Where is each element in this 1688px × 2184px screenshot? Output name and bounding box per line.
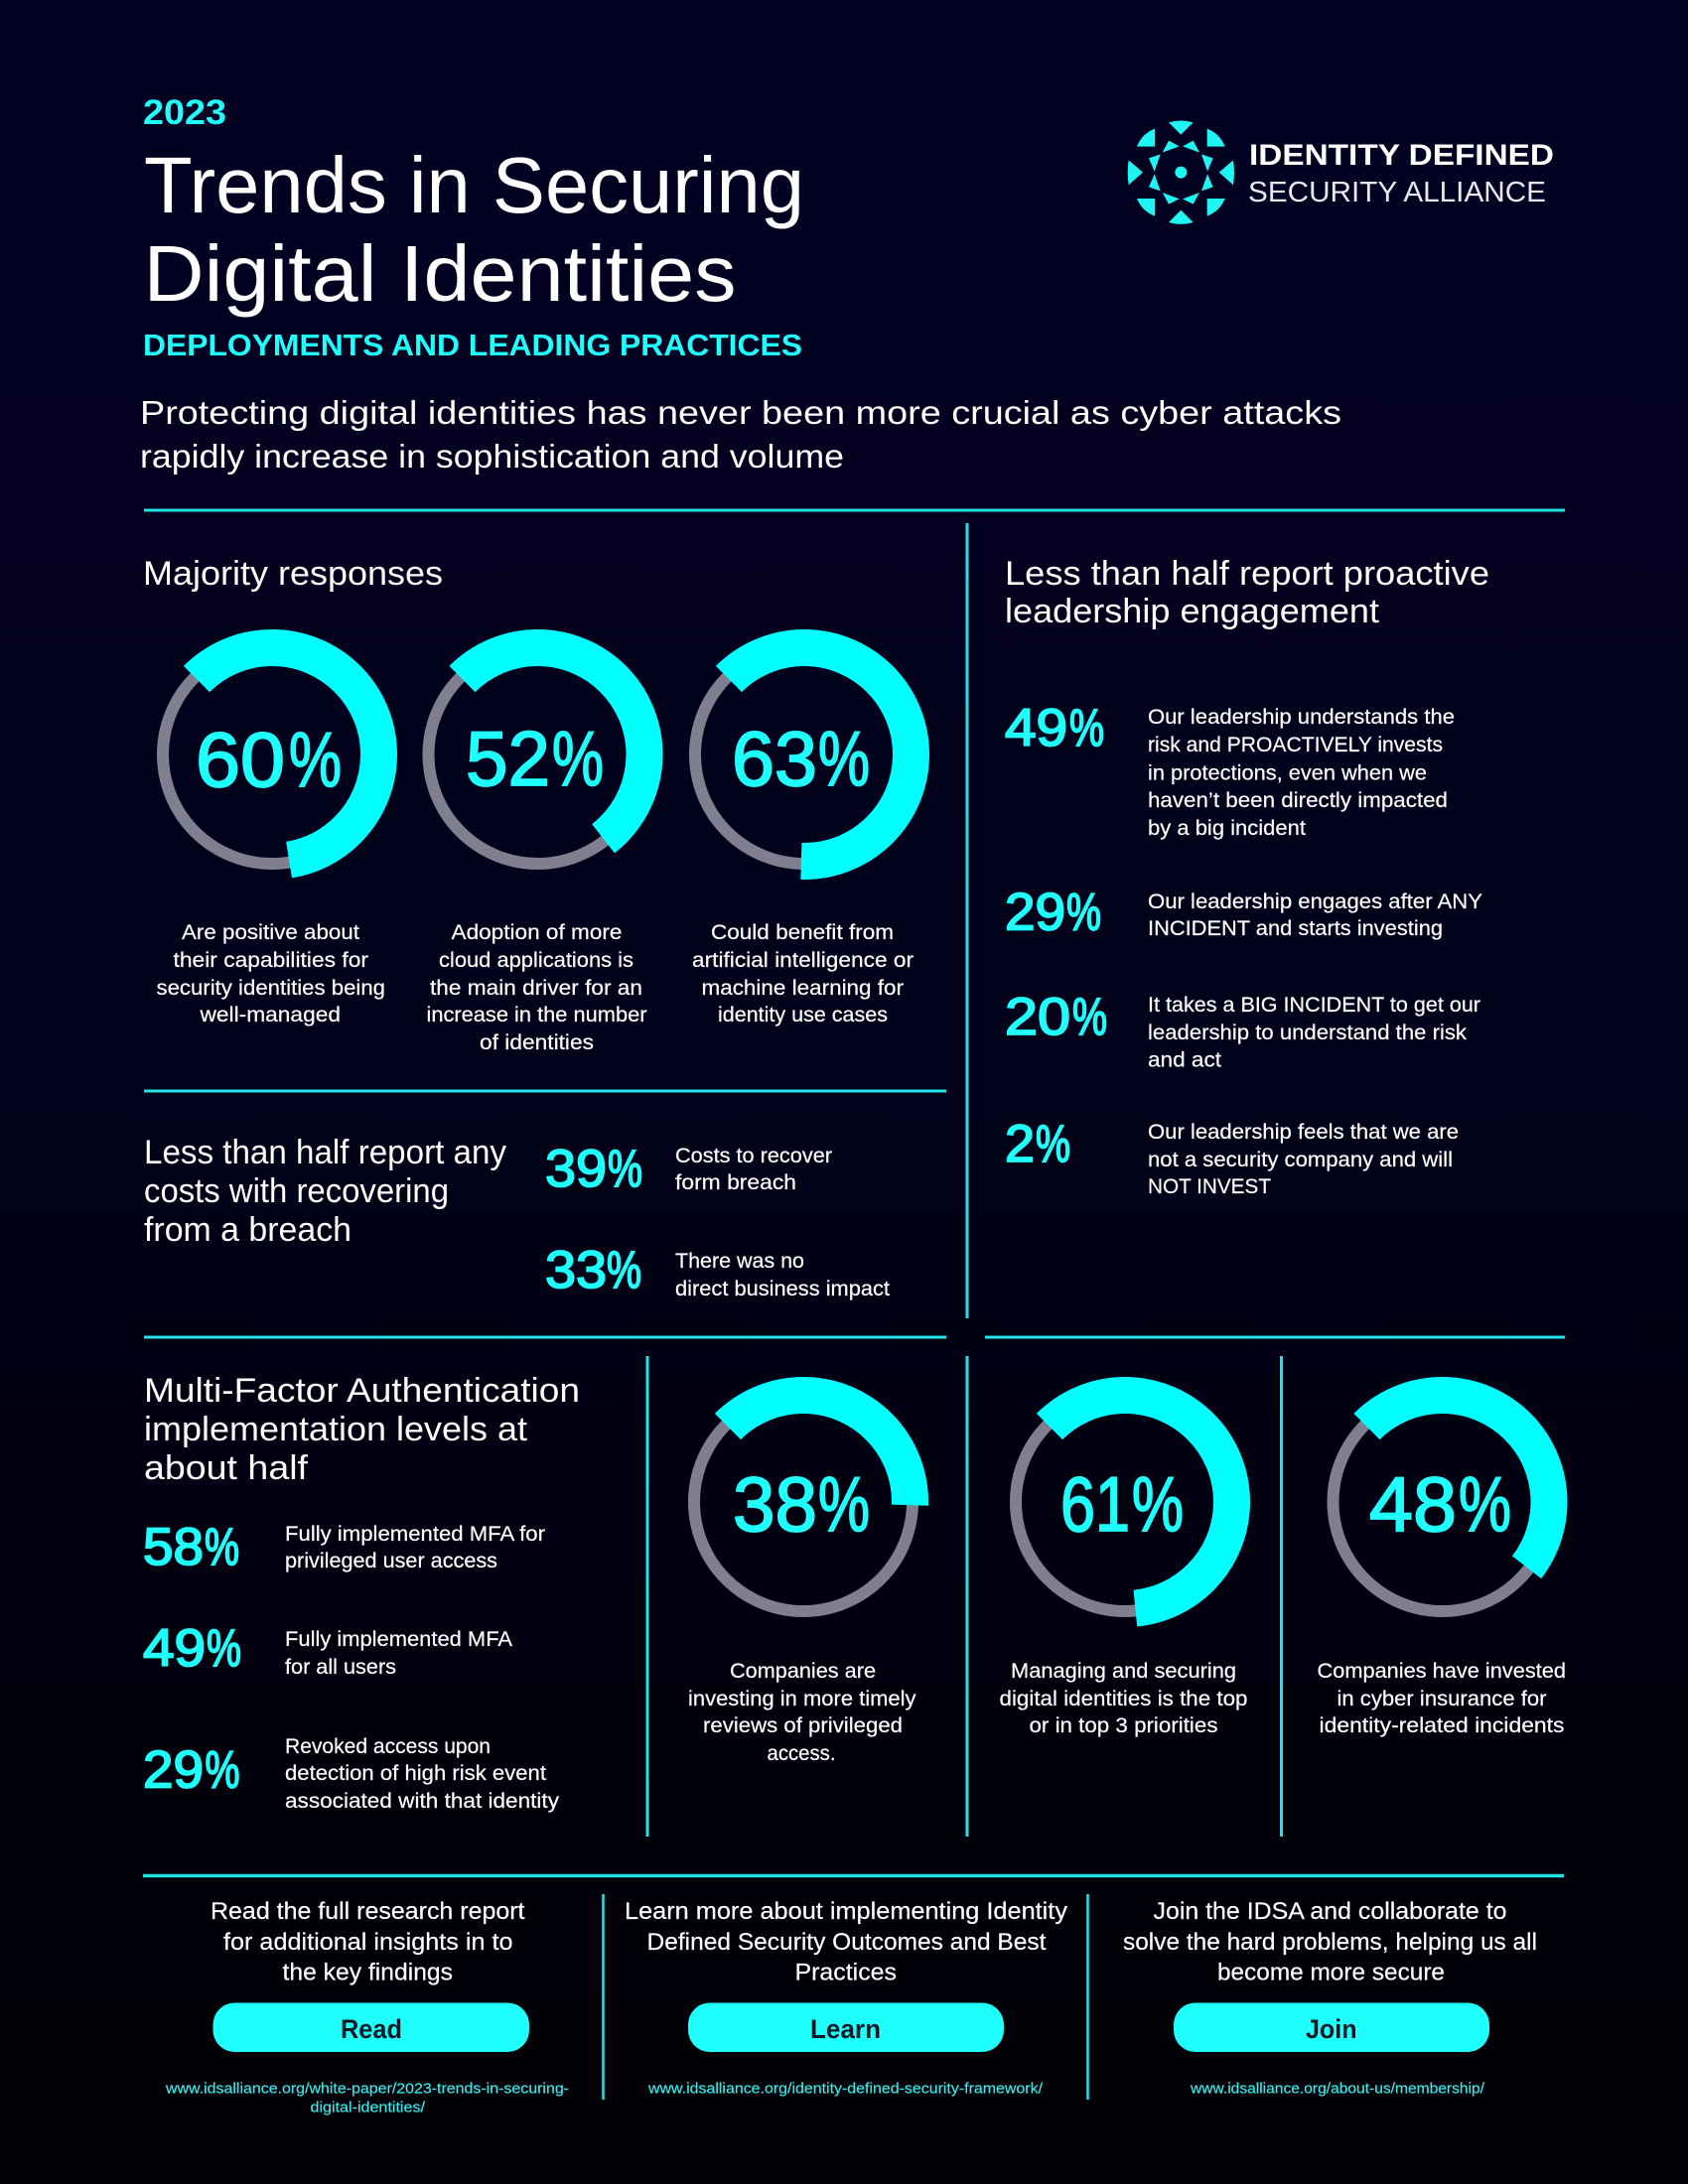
caption: 48%: in cyber insurance for — [1336, 1687, 1547, 1710]
donut: 52%: 52 — [466, 715, 550, 802]
call-to-action text: solve the hard problems, helping us all — [1123, 1929, 1537, 1956]
button: read: Read — [341, 2014, 402, 2044]
panel: multi-factor authentication — [143, 1372, 580, 1813]
stat: 58%: privileged user access — [285, 1549, 497, 1572]
donut: 63%: % — [818, 715, 870, 802]
caption: 63%: machine learning for — [701, 976, 904, 1000]
heading: Less than half report proactive — [1005, 555, 1489, 593]
stat: 2%: Our leadership feels that we are — [1148, 1120, 1459, 1144]
stat: 39%: % — [608, 1140, 642, 1198]
caption: 52% — [427, 920, 647, 1054]
donut: 38%: % — [818, 1460, 870, 1548]
stat: 49%: haven’t been directly impacted — [1148, 788, 1448, 812]
heading: costs with recovering — [144, 1172, 449, 1210]
caption: 48%: Companies have invested — [1317, 1659, 1566, 1683]
stat: 29%: Revoked access upon — [285, 1734, 491, 1758]
heading — [144, 1372, 580, 1487]
stat: 49%: in protections, even when we — [1148, 760, 1427, 784]
caption: 63%: identity use cases — [718, 1003, 888, 1026]
heading: Less than half report any — [144, 1134, 506, 1171]
stat: 29% — [1005, 884, 1482, 941]
stat: 2% — [1005, 1115, 1459, 1198]
stat: 39% — [545, 1140, 832, 1198]
call-to-action text: Practices — [794, 1960, 897, 1985]
stat: 58% — [143, 1518, 545, 1576]
stat: 49%: Our leadership understands the — [1148, 705, 1455, 729]
call-to-action text: become more secure — [1217, 1960, 1445, 1985]
call-to-action text: Join the IDSA and collaborate to — [1154, 1898, 1507, 1925]
caption: 48% — [1317, 1659, 1566, 1737]
stat: 20%: and act — [1148, 1048, 1221, 1072]
caption: 52%: increase in the number — [427, 1003, 647, 1026]
caption: 61%: Managing and securing — [1011, 1659, 1236, 1683]
stat: 20%: leadership to understand the risk — [1148, 1021, 1467, 1044]
call-to-action text: the key findings — [282, 1960, 453, 1985]
donut: 60% — [121, 604, 423, 905]
stat: 33% — [545, 1241, 890, 1300]
stat: 49%: % — [1069, 699, 1104, 757]
button: read — [212, 2003, 529, 2052]
link: www.idsalliance.org/identity-defined-security-framework/ — [647, 2081, 1044, 2097]
donut: 38% — [652, 1351, 954, 1653]
intro text — [140, 394, 1341, 475]
caption: 38%: reviews of privileged — [703, 1713, 903, 1737]
donut: 48%: 48 — [1369, 1460, 1457, 1548]
link — [165, 2081, 569, 2116]
donut: 48%: % — [1459, 1460, 1511, 1548]
donut: 63%: 63 — [732, 715, 817, 802]
stat: 39%: 39 — [545, 1140, 607, 1198]
caption: 60%: security identities being — [157, 976, 385, 1000]
stat: 20%: It takes a BIG INCIDENT to get our — [1148, 993, 1480, 1017]
intro text: rapidly increase in sophistication and volume — [140, 438, 844, 475]
stat: 39%: Costs to recover — [675, 1144, 832, 1167]
stat: 49% — [1005, 699, 1455, 840]
heading: Majority responses — [143, 555, 443, 593]
stat: 33%: % — [607, 1241, 641, 1299]
heading: implementation levels at — [144, 1411, 528, 1448]
title: Trends in Securing — [144, 141, 804, 229]
donut: 52% — [386, 604, 689, 905]
stat: 58%: Fully implemented MFA for — [285, 1522, 545, 1546]
panel: breach recovery costs — [144, 1134, 890, 1300]
button: learn — [688, 2003, 1004, 2052]
heading: about half — [144, 1449, 309, 1487]
button: join — [1174, 2003, 1489, 2052]
stat: 49%: risk and PROACTIVELY invests — [1148, 733, 1443, 756]
call-to-action text: Defined Security Outcomes and Best — [647, 1929, 1047, 1956]
heading — [144, 1134, 506, 1249]
donut: 60%: 60 — [196, 716, 285, 803]
stat: 29%: INCIDENT and starts investing — [1148, 916, 1443, 940]
donut: 60%: % — [289, 716, 342, 803]
panel: privileged access reviews — [652, 1351, 954, 1765]
stat: 49%: 49 — [1005, 699, 1067, 757]
caption: 60%: Are positive about — [182, 920, 359, 944]
stat: 39%: form breach — [675, 1170, 796, 1194]
caption: 61% — [999, 1659, 1248, 1737]
logo wordmark: SECURITY ALLIANCE — [1248, 177, 1546, 208]
stat: 29%: % — [205, 1741, 240, 1799]
stat: 29%: 29 — [143, 1741, 204, 1799]
donut: 38%: 38 — [733, 1460, 817, 1548]
stat: 29%: % — [1066, 884, 1101, 941]
icon: radial logo mark — [1128, 120, 1234, 224]
stat: 29%: Our leadership engages after ANY — [1148, 889, 1482, 913]
header — [140, 93, 1341, 475]
logo: Identity Defined Security Alliance — [1128, 120, 1554, 224]
stat: 29%: detection of high risk event — [285, 1761, 546, 1785]
heading: Multi-Factor Authentication — [144, 1372, 580, 1410]
link: www.idsalliance.org/about-us/membership/ — [1190, 2081, 1485, 2097]
caption: 63%: artificial intelligence or — [692, 948, 914, 972]
logo wordmark: IDENTITY DEFINED — [1249, 139, 1554, 172]
link: www.idsalliance.org/white-paper/2023-trends-in-securing- — [165, 2081, 569, 2097]
donut: 61%: 61 — [1060, 1460, 1130, 1548]
caption: 61%: digital identities is the top — [999, 1687, 1248, 1710]
stat: 49%: % — [207, 1619, 241, 1678]
panel: cyber insurance — [1291, 1351, 1594, 1737]
panel: identity priorities — [974, 1351, 1276, 1737]
caption: 48%: identity-related incidents — [1319, 1713, 1565, 1737]
caption: 38% — [688, 1659, 916, 1765]
stat: 29%: associated with that identity — [285, 1789, 559, 1813]
donut: 61% — [974, 1351, 1276, 1653]
call-to-action text — [625, 1898, 1068, 1985]
link: digital-identities/ — [310, 2101, 426, 2116]
caption: 60%: well-managed — [199, 1003, 341, 1026]
stat: 29% — [143, 1734, 559, 1813]
title — [143, 141, 804, 318]
year: 2023 — [143, 93, 226, 132]
stat: 20%: % — [1072, 988, 1107, 1046]
stat: 58%: % — [205, 1518, 239, 1576]
stat: 2%: % — [1036, 1115, 1070, 1173]
footer column: join — [1123, 1898, 1537, 2097]
title: Digital Identities — [143, 229, 737, 318]
caption: 38%: Companies are — [730, 1659, 876, 1683]
caption: 60%: their capabilities for — [173, 948, 368, 972]
footer column: learn — [625, 1898, 1068, 2097]
panel: proactive leadership engagement — [1005, 555, 1489, 1198]
divider lines — [143, 510, 1565, 2100]
stat: 2%: 2 — [1005, 1115, 1035, 1173]
stat: 33%: direct business impact — [675, 1277, 890, 1300]
stat: 49%: 49 — [143, 1619, 206, 1678]
stat: 49%: Fully implemented MFA — [285, 1627, 513, 1651]
caption: 60% — [157, 920, 385, 1026]
subtitle: DEPLOYMENTS AND LEADING PRACTICES — [143, 328, 802, 362]
stat: 2%: NOT INVEST — [1148, 1174, 1271, 1198]
call-to-action text — [1123, 1898, 1537, 1985]
stat: 49%: by a big incident — [1148, 816, 1306, 840]
caption: 52%: of identities — [480, 1030, 594, 1054]
stat: 20%: 20 — [1005, 988, 1070, 1046]
caption: 63%: Could benefit from — [711, 920, 894, 944]
call-to-action text: Read the full research report — [211, 1898, 525, 1925]
heading: from a breach — [144, 1211, 352, 1249]
call-to-action text — [211, 1898, 525, 1985]
caption: 52%: Adoption of more — [451, 920, 622, 944]
intro text: Protecting digital identities has never been more crucial as cyber attacks — [140, 394, 1341, 431]
stat: 58%: 58 — [143, 1518, 204, 1576]
stat: 49%: for all users — [285, 1655, 396, 1679]
stat: 29%: 29 — [1005, 884, 1065, 941]
donut: 48% — [1291, 1351, 1594, 1653]
footer column: read — [165, 1898, 569, 2116]
stat: 33%: 33 — [545, 1241, 607, 1299]
heading — [1005, 555, 1489, 630]
caption: 38%: investing in more timely — [688, 1687, 916, 1710]
stat: 33%: There was no — [675, 1249, 804, 1273]
call-to-action text: Learn more about implementing Identity — [625, 1898, 1068, 1925]
caption: 63% — [692, 920, 914, 1026]
donut: 52%: % — [552, 715, 604, 802]
donut: 61%: % — [1132, 1460, 1184, 1548]
caption: 61%: or in top 3 priorities — [1029, 1713, 1217, 1737]
stat: 20% — [1005, 988, 1480, 1072]
stat: 49% — [143, 1619, 513, 1679]
logo wordmark — [1248, 139, 1554, 208]
caption: 52%: cloud applications is — [439, 948, 633, 972]
panel: majority responses — [121, 555, 955, 1054]
caption: 38%: access. — [767, 1741, 836, 1765]
stat: 2%: not a security company and will — [1148, 1148, 1453, 1171]
caption: 52%: the main driver for an — [430, 976, 642, 1000]
button: join: Join — [1306, 2014, 1356, 2044]
call-to-action text: for additional insights in to — [223, 1929, 512, 1956]
button: learn: Learn — [810, 2014, 881, 2044]
heading: leadership engagement — [1005, 593, 1380, 630]
donut: 63% — [653, 604, 955, 905]
